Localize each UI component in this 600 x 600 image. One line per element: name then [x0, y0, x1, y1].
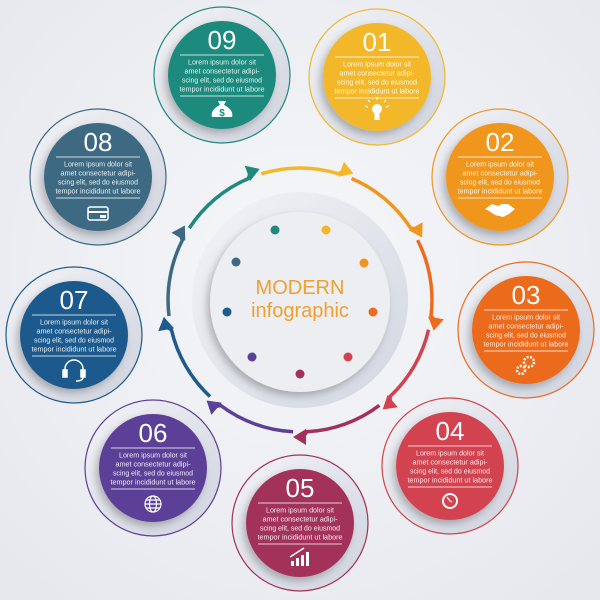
panel 04: 04: [436, 416, 464, 446]
icon: bulb: [365, 97, 389, 120]
panel 08: [30, 109, 166, 245]
icon: handshake: [485, 204, 515, 217]
arrow 01: [261, 137, 356, 203]
panel 01: 01: [363, 27, 391, 57]
icon: credit card: [88, 207, 108, 220]
arrow 02: [352, 159, 429, 253]
icon: headset: [63, 360, 85, 381]
panel 01: [309, 9, 445, 145]
arrow ring: [135, 137, 457, 462]
panel 03: [458, 262, 594, 398]
panel 07: [6, 267, 142, 403]
center title: MODERN: [256, 277, 344, 299]
center title: infographic: [251, 300, 349, 322]
center disc: [192, 192, 408, 408]
panel 08: 08: [84, 127, 112, 157]
icon: globe: [145, 496, 161, 512]
panel 09: [154, 7, 290, 143]
panel 02: 02: [486, 127, 514, 157]
icon: clock: [442, 493, 458, 509]
panel 04: [382, 398, 518, 534]
center dots: [222, 226, 378, 378]
arrow 08: [135, 221, 212, 316]
arrow 06: [201, 376, 293, 462]
icon: money bag: $: [219, 108, 225, 119]
arrow 03: [403, 240, 457, 332]
arrow 05: [293, 405, 379, 445]
panel 06: 06: [139, 418, 167, 448]
arrow 09: [176, 161, 271, 228]
panel 05: [232, 455, 368, 591]
panel 06: [85, 400, 221, 536]
icon: gears: [517, 357, 534, 374]
panel 03: 03: [512, 280, 540, 310]
arrow 07: [156, 311, 210, 403]
panel 05: 05: [286, 473, 314, 503]
panel 09: 09: [208, 25, 236, 55]
center title: [251, 277, 349, 322]
panel 02: [432, 109, 568, 245]
panel 07: 07: [60, 285, 88, 315]
arrow 04: [362, 330, 454, 416]
icon: bar chart: [290, 548, 309, 566]
